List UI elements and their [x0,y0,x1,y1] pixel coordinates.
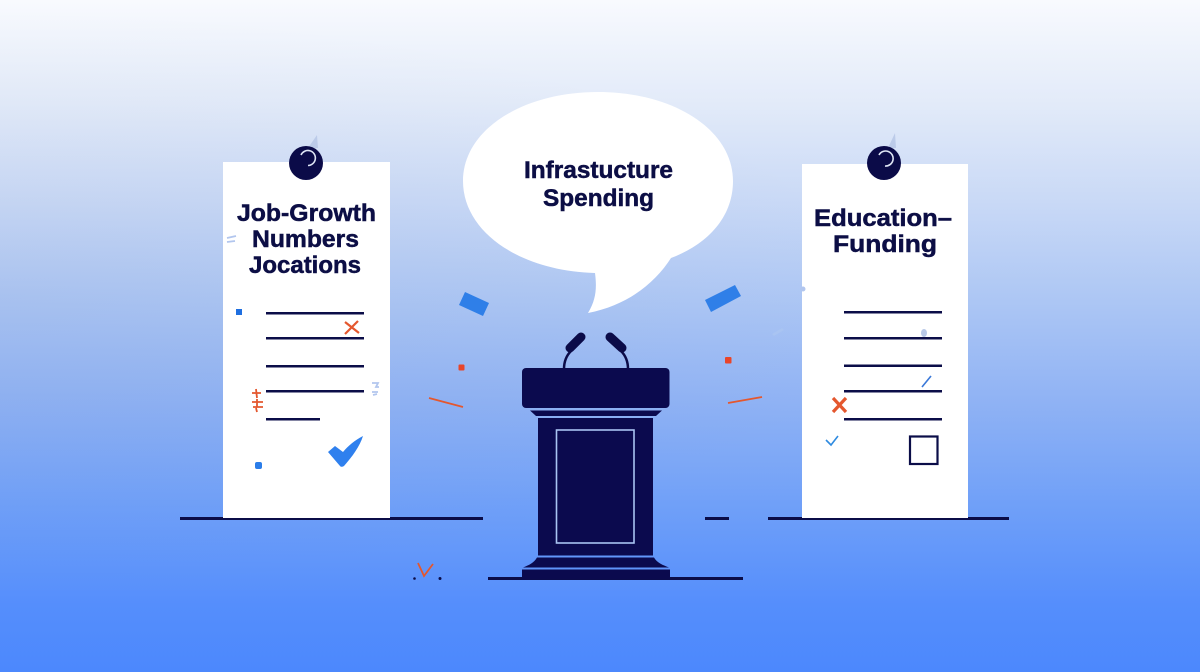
list lines left [266,312,364,420]
podium base [523,558,669,568]
podium [522,337,670,580]
small dots [413,577,442,580]
icon: edge dot [800,286,806,292]
podium panel [556,430,634,543]
speech bubble [463,92,733,313]
blue rectangle right [705,285,741,312]
pin right [867,133,901,180]
ground lines [180,517,1009,580]
heading: job growth: Jocations [249,252,361,279]
heading: education funding: Education– [814,205,952,232]
podium top [522,368,670,408]
blue rectangle left [459,292,489,316]
heading: job growth: Numbers [252,226,359,253]
icon: faint dot [921,329,927,337]
icon: faint marks [227,236,379,395]
confetti [413,285,784,580]
icon: red marks [252,389,263,412]
icon: blue square bottom [255,462,262,469]
pin left [289,135,323,180]
bubble text [524,157,673,212]
icon: blue square top [236,309,242,315]
heading: job growth: Job-Growth [237,200,376,227]
heading: education funding [814,205,952,258]
icon: small blue check [826,436,838,445]
podium body [538,418,653,556]
list lines right [844,311,942,420]
icon: blue check [328,436,363,467]
faint chip [772,328,784,336]
panel: job growth paper [223,135,390,518]
icon: small blue tick [922,376,931,387]
microphones [564,337,628,369]
red dots [458,357,732,370]
red dashes [418,397,762,576]
heading: job growth [237,200,376,279]
icon: red x left [345,321,359,334]
podium collar [530,410,662,416]
bubble text: Infrastucture [524,157,673,184]
bubble text: Spending [543,185,654,212]
heading: education funding: Funding [833,231,937,258]
icon: red x right [833,398,846,412]
panel: education funding paper [800,133,968,518]
icon: empty checkbox [910,436,938,464]
